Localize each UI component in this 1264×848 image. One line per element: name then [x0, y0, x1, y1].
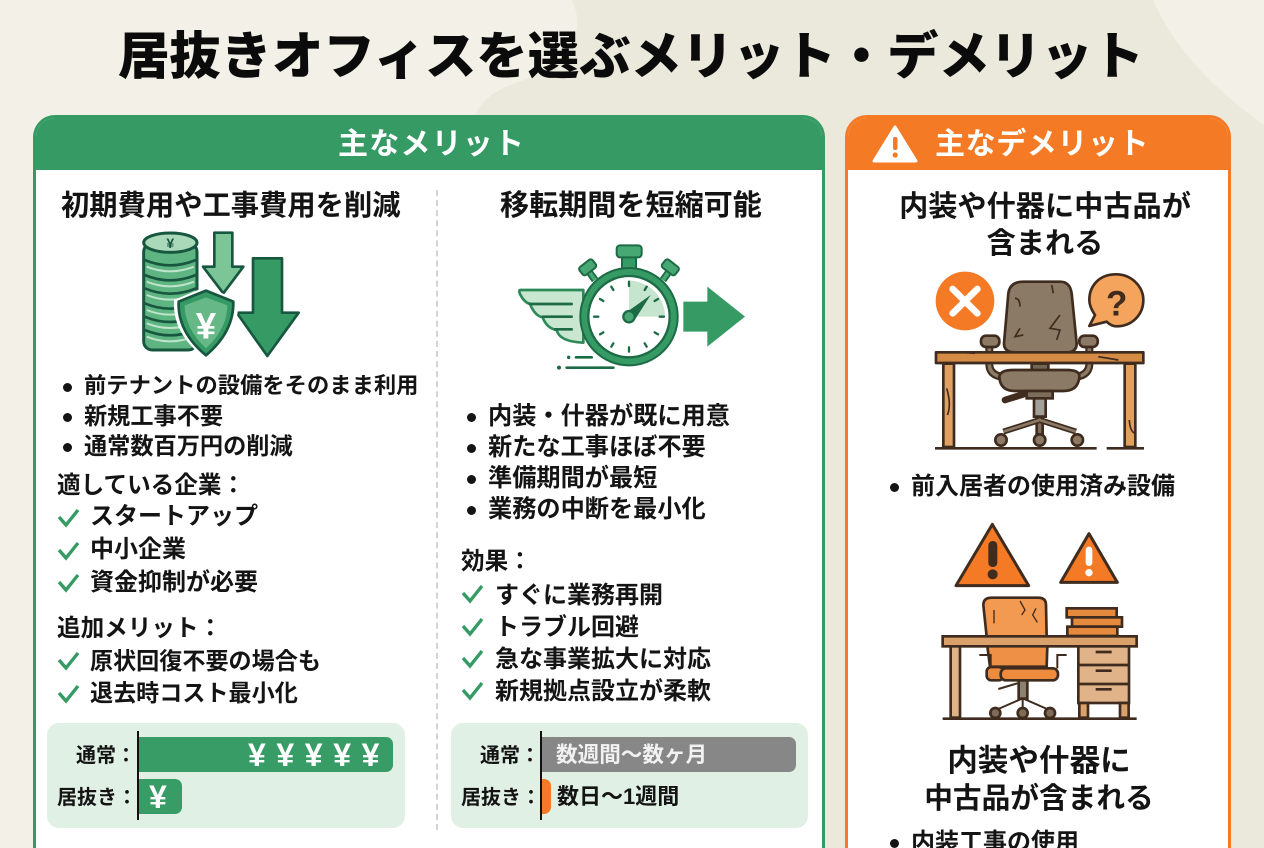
chart: time comparison: 数週間～数ヶ月: [556, 742, 707, 767]
chart: time comparison: 通常：: [480, 745, 540, 767]
icon: header warning: [872, 125, 918, 162]
icon: coins and arrows: [142, 231, 300, 358]
list: extra merits: [57, 616, 321, 706]
icon: worn chair and desk: [934, 272, 1145, 450]
list: effects: [461, 548, 711, 705]
list: extra merits: 退去時コスト最小化: [90, 680, 298, 706]
list: effects: 効果：: [461, 549, 532, 575]
bullets: shorter move: 内装・什器が既に用意: [488, 403, 730, 430]
bullets: shorter move: 業務の中断を最小化: [488, 496, 706, 523]
icon: warnings and desk: [941, 522, 1138, 720]
heading: used fixtures second: 内装や什器に: [947, 744, 1131, 778]
icon: coins and arrows: ¥: [196, 305, 217, 346]
bullets: shorter move: 準備期間が最短: [488, 465, 657, 492]
panel: merits: [33, 115, 825, 848]
chart: time comparison: [451, 723, 808, 828]
icon: winged stopwatch: [518, 244, 745, 370]
list: suitable companies: [57, 472, 258, 596]
heading: used fixtures: 内装や什器に中古品が: [899, 191, 1191, 223]
icon: worn chair and desk: ?: [1106, 285, 1127, 324]
column divider: [436, 190, 438, 830]
chart: time comparison: 居抜き：: [461, 787, 541, 809]
list: suitable companies: 資金抑制が必要: [90, 569, 258, 596]
title: 居抜きオフィスを選ぶメリット・デメリット: [118, 28, 1144, 85]
panel: demerits: [845, 115, 1231, 848]
heading: shorter move: 移転期間を短縮可能: [500, 190, 762, 222]
bullets: cost reduction: [63, 373, 418, 459]
heading: used fixtures: 含まれる: [987, 228, 1103, 260]
demerits heading: 主なデメリット: [935, 128, 1149, 161]
chart: time comparison: 数日～1週間: [557, 784, 679, 809]
bullets: shorter move: [467, 402, 730, 523]
bullets: shorter move: 新たな工事ほぼ不要: [488, 434, 706, 461]
bullets: cost reduction: 前テナントの設備をそのまま利用: [84, 373, 418, 398]
list: effects: すぐに業務再開: [495, 582, 663, 609]
chart: cost comparison: 通常：: [76, 745, 136, 767]
list: effects: 急な事業拡大に対応: [495, 646, 711, 673]
bullets: cost reduction: 通常数百万円の削減: [84, 433, 293, 459]
heading: used fixtures second: 中古品が含まれる: [924, 782, 1154, 814]
list: suitable companies: 中小企業: [90, 536, 186, 563]
list: extra merits: 追加メリット：: [57, 616, 222, 642]
bullet: used equipment: 前入居者の使用済み設備: [911, 473, 1175, 500]
chart: cost comparison: [47, 723, 405, 828]
demerits header bar: [845, 115, 1231, 170]
chart: cost comparison: 居抜き：: [57, 787, 137, 809]
merits heading: 主なメリット: [338, 128, 525, 161]
heading: used fixtures second: [924, 744, 1154, 814]
list: effects: トラブル回避: [495, 614, 639, 641]
list: suitable companies: スタートアップ: [90, 503, 258, 530]
bullets: cost reduction: 新規工事不要: [84, 403, 223, 429]
chart: cost comparison: ¥: [149, 779, 167, 815]
heading: cost reduction: 初期費用や工事費用を削減: [61, 189, 401, 221]
list: effects: 新規拠点設立が柔軟: [495, 678, 711, 705]
icon: coins and arrows: ¥: [166, 235, 174, 251]
list: suitable companies: 適している企業：: [57, 473, 245, 499]
merits header bar: [33, 115, 825, 170]
chart: cost comparison: ¥¥¥¥¥: [248, 737, 390, 773]
list: extra merits: 原状回復不要の場合も: [90, 648, 321, 674]
heading: used fixtures: [899, 190, 1191, 260]
